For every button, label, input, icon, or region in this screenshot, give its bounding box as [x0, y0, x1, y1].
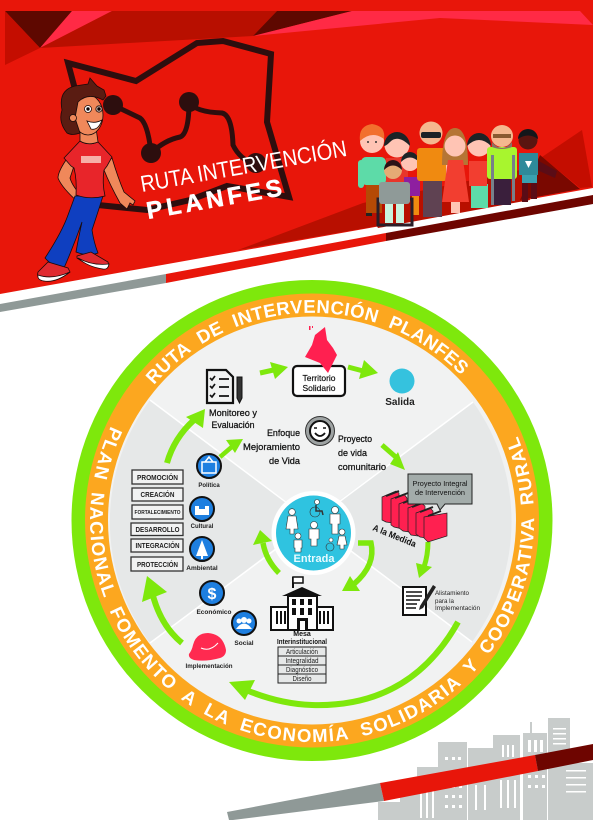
icon: colombia map	[305, 326, 337, 373]
label: mesa interinstitucional: Interinstitucional	[277, 639, 327, 646]
label: enfoque mejoramiento de vida: de Vida	[269, 456, 300, 466]
label: monitoreo y evaluacion: Evaluación	[212, 420, 254, 430]
icon: ambiental	[186, 537, 218, 572]
character: boy	[38, 78, 135, 281]
icon: smile	[306, 416, 334, 446]
label: proyecto de vida comunitario: Proyecto	[338, 434, 372, 444]
ring text: top title: RUTA DE INTERVENCIÓN PLANFES	[145, 300, 468, 384]
arrow: monitoring to territory	[260, 362, 288, 379]
person redhead	[358, 124, 386, 216]
arrow: boxes to monitoring	[167, 409, 205, 463]
box: territorio solidario: Territorio	[302, 373, 336, 383]
route with stops	[103, 92, 266, 173]
table: mesa functions: Diagnóstico	[286, 667, 318, 674]
figure: small wheelchair	[326, 538, 334, 551]
label: monitoreo y evaluacion: Monitoreo y	[209, 408, 258, 418]
icon: helmet	[186, 633, 233, 670]
label: alistamiento para la implementacion	[435, 591, 480, 612]
label: enfoque mejoramiento de vida: Enfoque	[267, 428, 300, 438]
exit marker: salida: Salida	[385, 397, 415, 408]
figure: woman	[286, 509, 298, 534]
icon: ambiental: Ambiental	[186, 565, 218, 572]
icon: alistamiento document	[403, 585, 436, 615]
person boy teal	[518, 129, 557, 202]
header stripe	[0, 195, 593, 312]
label: mesa interinstitucional: Mesa	[293, 631, 311, 638]
label: monitoreo y evaluacion	[209, 408, 258, 430]
figure: wheelchair	[310, 500, 323, 517]
callout: proyecto integral: de Intervención	[415, 488, 465, 497]
label: proyecto de vida comunitario: de vida	[338, 448, 367, 458]
table: mesa functions: Articulación	[286, 649, 318, 656]
box: territorio solidario: Solidario	[302, 383, 336, 393]
title: planfes: PLANFES	[144, 175, 284, 225]
left stacked boxes: PROTECCIÓN	[137, 560, 178, 569]
label: mesa interinstitucional	[277, 631, 327, 646]
arrow: politica to enfoque	[220, 439, 243, 457]
left stacked boxes: FORTALECIMIENTO	[134, 510, 181, 516]
map outline route	[68, 41, 289, 210]
label: proyecto de vida comunitario	[338, 434, 386, 472]
icon: politica: Política	[198, 483, 220, 489]
icon: economico: Económico	[196, 609, 232, 616]
callout: proyecto integral	[408, 474, 472, 510]
exit marker: salida	[385, 368, 415, 408]
arrow: implementation to boxes	[142, 576, 182, 643]
arrow: entrada to school	[342, 543, 372, 591]
left stacked boxes: INTEGRACIÓN	[136, 541, 180, 550]
person child purple	[401, 152, 420, 215]
title: ruta intervencion: RUTA INTERVENCIÓN	[138, 135, 349, 197]
label: enfoque mejoramiento de vida: Mejoramiento	[243, 442, 300, 452]
icon: social: Social	[234, 640, 254, 647]
person woman brown hair	[442, 128, 469, 213]
label: proyecto de vida comunitario: comunitario	[338, 462, 386, 472]
left stacked boxes: CREACIÓN	[140, 490, 174, 499]
icon: school	[271, 577, 333, 630]
person wheelchair	[378, 160, 412, 225]
icon: economico	[196, 581, 232, 616]
table: mesa functions	[278, 647, 326, 683]
panel: red header	[0, 0, 593, 294]
callout: proyecto integral: Proyecto Integral	[412, 479, 468, 488]
person older man	[487, 125, 517, 205]
figure: central man	[309, 522, 319, 546]
entrada circle: Entrada	[294, 553, 335, 565]
figure: man	[330, 506, 340, 534]
table: mesa functions: Integralidad	[286, 658, 319, 665]
left stacked boxes	[131, 470, 183, 571]
icon: economico: $	[208, 586, 217, 603]
table: mesa functions: Diseño	[292, 676, 312, 683]
ring text: bottom title: PLAN NACIONAL FOMENTO A LA ECONOMÍA SOLIDARIA Y COOPERATIVA RURAL	[90, 427, 534, 742]
panel: circular diagram	[72, 280, 552, 761]
arrow: books to alistamiento	[416, 542, 432, 578]
background person black hair	[384, 132, 410, 183]
icon: books	[382, 491, 447, 542]
icon: helmet: Implementación	[186, 663, 233, 670]
box: territorio solidario	[293, 366, 345, 396]
label: alistamiento para la implementacion: Alistamiento	[435, 591, 470, 597]
left stacked boxes: DESARROLLO	[136, 527, 180, 534]
decoration: city skyline	[378, 718, 593, 820]
icon: checklist	[207, 370, 242, 403]
label: enfoque mejoramiento de vida	[243, 428, 300, 466]
person woman black hair	[467, 133, 491, 208]
figure: small woman	[337, 529, 347, 549]
arrow: school to entrada	[253, 530, 279, 573]
icon: politica	[197, 454, 221, 489]
label: alistamiento para la implementacion: para la	[435, 599, 455, 605]
icon: cultural: Cultural	[191, 524, 214, 530]
left stacked boxes: PROMOCIÓN	[137, 473, 178, 482]
arrow: large bottom	[229, 622, 458, 705]
label: a la medida: A la Medida	[371, 523, 418, 549]
label: alistamiento para la implementacion: Implementación	[435, 606, 480, 612]
person man sunglasses	[417, 122, 451, 217]
figure: child	[294, 533, 302, 552]
footer stripe	[227, 744, 593, 820]
people group	[358, 122, 557, 225]
icon: social	[232, 611, 256, 647]
arrow: territory to exit	[348, 360, 378, 379]
arrow: proyecto to books	[382, 445, 405, 470]
entrada circle	[272, 491, 356, 575]
icon: cultural	[190, 497, 214, 530]
